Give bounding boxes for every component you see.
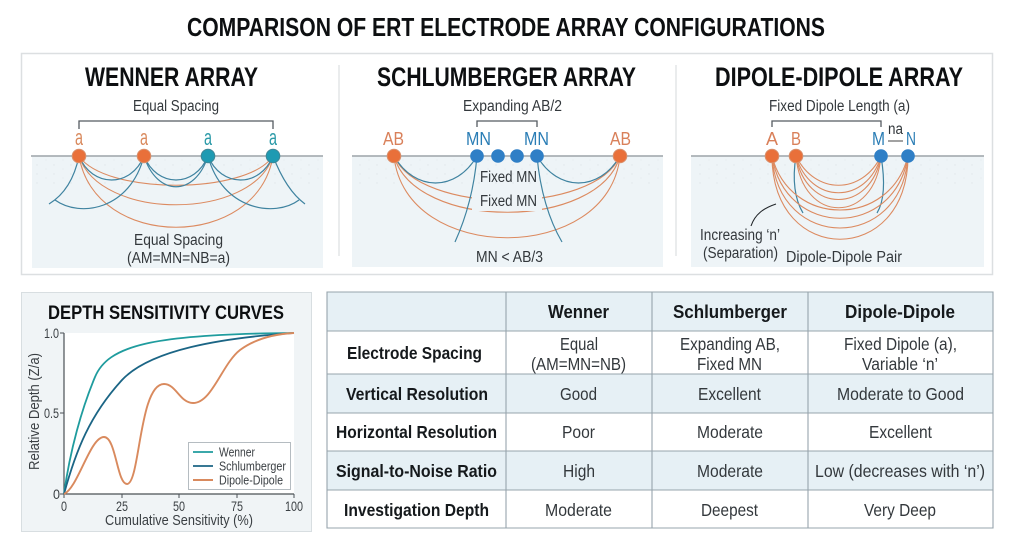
electrode labels: A [766, 128, 779, 149]
electrode labels: M [872, 128, 885, 149]
x-axis ticks: 50 [173, 498, 185, 514]
electrode labels: a [269, 125, 277, 150]
row: electrode spacing: Fixed Dipole (a), [844, 334, 957, 354]
label: increasing n: (Separation) [703, 245, 778, 262]
labels: fixed MN: Fixed MN [480, 169, 537, 186]
current arcs [394, 156, 620, 242]
row: investigation depth: Very Deep [864, 500, 936, 520]
curve: Dipole-Dipole [64, 333, 294, 494]
label: na spacing: na [888, 121, 903, 138]
row: vertical resolution: Vertical Resolution [346, 384, 488, 404]
row: electrode spacing: Expanding AB, [680, 334, 780, 354]
row: investigation depth: Investigation Depth [344, 500, 489, 520]
row: vertical resolution: Excellent [698, 384, 761, 404]
caption: Dipole-Dipole Pair [786, 249, 902, 266]
table header: Wenner [548, 301, 609, 322]
ground [31, 156, 323, 268]
row: vertical resolution: Moderate to Good [837, 384, 964, 404]
electrode labels: a [140, 125, 148, 150]
heading: DEPTH SENSITIVITY CURVES [48, 302, 284, 324]
row: signal-to-noise ratio [336, 461, 985, 481]
caption [127, 232, 230, 267]
row: signal-to-noise ratio: Signal-to-Noise Ratio [336, 461, 497, 481]
electrode labels: N [906, 128, 916, 149]
table header: Dipole-Dipole [845, 301, 955, 322]
ground [691, 156, 984, 267]
row: signal-to-noise ratio: Low (decreases with ‘n’) [815, 461, 985, 481]
labels: fixed MN [480, 169, 537, 210]
heading: Wenner array: WENNER ARRAY [85, 62, 258, 92]
row: horizontal resolution [336, 422, 932, 442]
row: vertical resolution [346, 384, 964, 404]
legend: Dipole-Dipole [219, 472, 283, 488]
bracket [79, 121, 273, 129]
comparison table [327, 292, 993, 528]
label: equal spacing: Equal Spacing [133, 98, 219, 115]
bracket [477, 121, 537, 127]
curve: Wenner [64, 333, 294, 494]
label: increasing n: Increasing ‘n’ [700, 227, 780, 244]
caption: Equal Spacing [134, 232, 223, 249]
electrodes [765, 149, 915, 163]
panel: array configurations [22, 54, 992, 274]
label: fixed dipole length: Fixed Dipole Length (a) [769, 98, 910, 115]
electrode labels: B [791, 128, 801, 149]
y-axis ticks: 0.5 [44, 405, 59, 421]
y-axis ticks [44, 325, 60, 502]
y-axis ticks: 1.0 [44, 325, 59, 341]
legend: Wenner [219, 444, 256, 460]
y-axis title: Relative Depth (Z/a) [26, 353, 43, 470]
electrode labels: AB [610, 128, 631, 149]
curve: Schlumberger [64, 333, 294, 494]
row: horizontal resolution: Horizontal Resolution [336, 422, 497, 442]
electrodes [72, 149, 280, 163]
current arcs [49, 156, 305, 227]
label: expanding AB/2: Expanding AB/2 [463, 98, 562, 115]
x-axis ticks [61, 498, 303, 514]
electrode labels: a [204, 125, 212, 150]
row: electrode spacing: Electrode Spacing [347, 343, 482, 363]
electrode labels: AB [383, 128, 404, 149]
row: investigation depth: Deepest [701, 500, 758, 520]
y-axis ticks: 0 [53, 486, 60, 502]
row: signal-to-noise ratio: Moderate [697, 461, 763, 481]
leader arrow [751, 204, 776, 226]
row: electrode spacing: (AM=MN=NB) [531, 354, 626, 374]
row: electrode spacing [347, 334, 957, 374]
table header: Schlumberger [673, 301, 787, 322]
electrode labels [75, 125, 277, 150]
table header [548, 301, 955, 322]
table row fills [327, 292, 993, 528]
electrode labels: MN [466, 128, 491, 149]
main title: COMPARISON OF ERT ELECTRODE ARRAY CONFIGURATIONS [187, 12, 825, 42]
legend: Schlumberger [219, 458, 287, 474]
x-axis ticks: 75 [231, 498, 243, 514]
panel: depth sensitivity curves [22, 292, 312, 532]
ground [352, 156, 663, 267]
heading: Schlumberger array: SCHLUMBERGER ARRAY [377, 62, 636, 92]
plot area [64, 333, 294, 494]
heading: Dipole-Dipole array: DIPOLE-DIPOLE ARRAY [715, 62, 963, 92]
table grid [327, 292, 993, 528]
row: electrode spacing: Equal [560, 334, 598, 354]
x-axis title: Cumulative Sensitivity (%) [105, 512, 253, 529]
axes [60, 333, 294, 498]
label: increasing n [700, 227, 780, 262]
row: signal-to-noise ratio: High [563, 461, 595, 481]
bracket [772, 121, 881, 127]
caption: MN < AB/3 [476, 249, 543, 266]
electrode labels: a [75, 125, 83, 150]
x-axis ticks: 100 [285, 498, 303, 514]
row: vertical resolution: Good [560, 384, 597, 404]
panel: Schlumberger array [352, 62, 663, 267]
electrodes [387, 149, 627, 163]
row: electrode spacing: Variable ‘n’ [862, 354, 938, 374]
x-axis ticks: 25 [116, 498, 128, 514]
panel: Dipole-Dipole array [691, 62, 984, 267]
row: horizontal resolution: Poor [562, 422, 595, 442]
x-axis ticks: 0 [61, 498, 67, 514]
caption: (AM=MN=NB=a) [127, 250, 230, 267]
row: horizontal resolution: Excellent [869, 422, 932, 442]
panel: Wenner array [31, 62, 323, 268]
legend [188, 442, 290, 490]
row: investigation depth: Moderate [545, 500, 612, 520]
row: investigation depth [344, 500, 936, 520]
row: horizontal resolution: Moderate [697, 422, 763, 442]
electrode labels: MN [524, 128, 549, 149]
electrode labels [766, 128, 916, 149]
electrode labels [383, 128, 631, 149]
row: electrode spacing: Fixed MN [697, 354, 762, 374]
current arcs [772, 156, 908, 239]
labels: fixed MN: Fixed MN [480, 193, 537, 210]
